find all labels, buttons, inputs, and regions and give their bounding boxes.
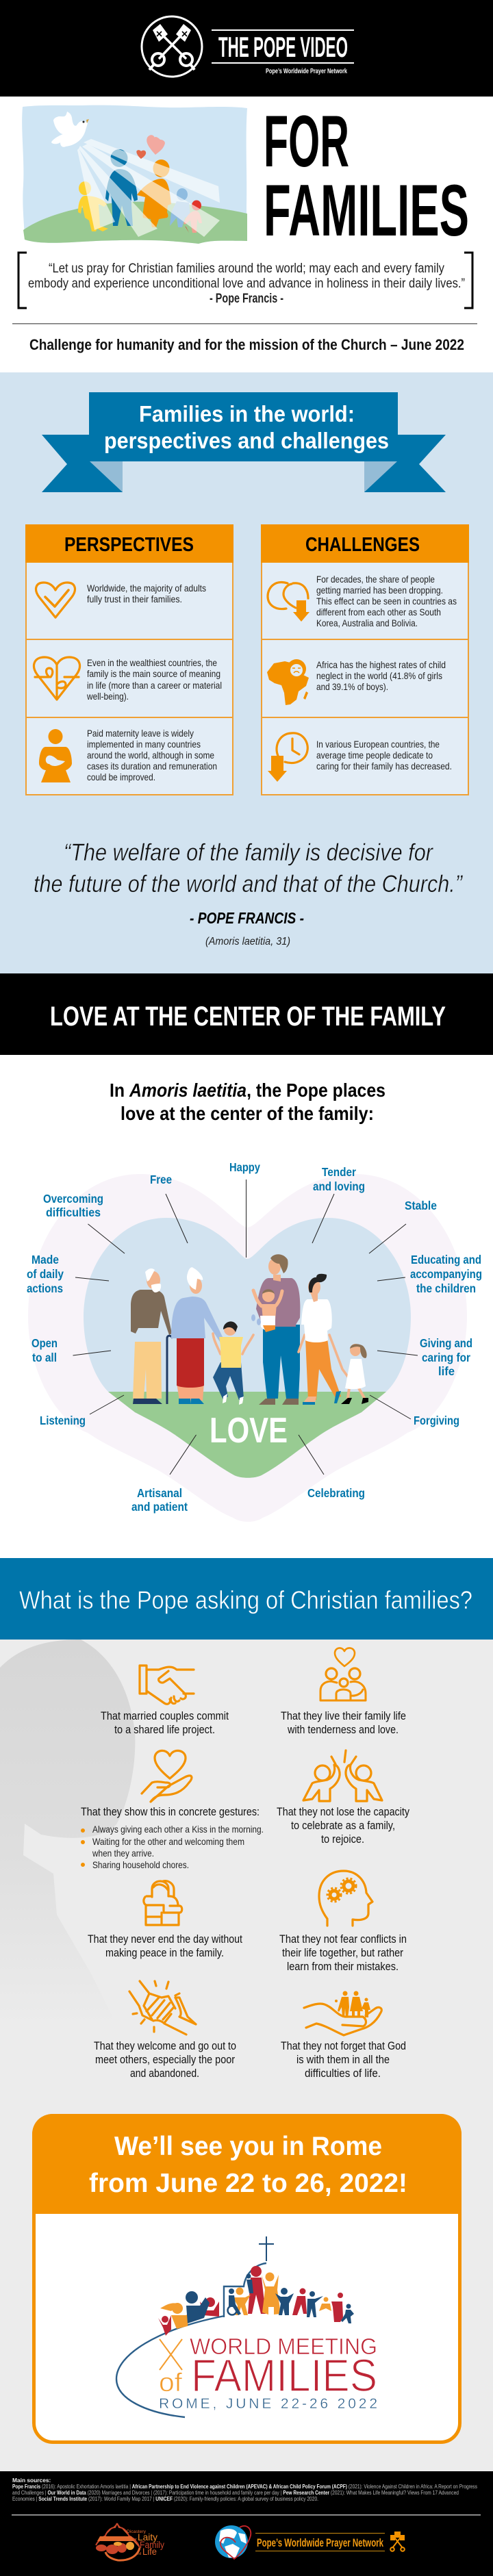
logo: dicastery for laity family and life: for [133,2538,137,2542]
text: shared life: to a shared life project. [114,1723,215,1736]
text: neglect: and 39.1% of boys). [316,682,388,692]
text: welcome others [94,2039,236,2080]
text: make peace [88,1933,242,1959]
text: neglect: Africa has the highest rates of child [316,660,446,670]
footer [0,2471,493,2576]
text: conflicts: learn from their mistakes. [287,1960,399,1973]
section band: what is the pope asking [0,1558,493,1640]
figure: father with baby [251,1254,300,1405]
people [158,2266,343,2336]
figure: girl [341,1344,368,1404]
label: free: Free [150,1173,172,1186]
silhouette of the pope [0,1640,135,2061]
text: marriage [316,574,457,628]
icon: head with gears [319,1871,372,1926]
label: tender and loving [313,1165,365,1193]
prayer text [28,262,465,306]
icon: embrace [144,1881,182,1925]
icon: dove [51,112,89,147]
inner heart [84,1218,411,1478]
logo: world meeting of families [116,2236,377,2417]
text: conflicts: That they not fear conflicts in [279,1933,407,1946]
text: marriage: different from each other as South [316,607,441,617]
ground [108,1392,386,1478]
wordmark: THE POPE VIDEO [218,31,348,63]
rule above wordmark [212,29,354,31]
dome and arc [116,2263,266,2417]
figure: mother [299,1274,351,1405]
quote block with brackets [18,253,472,308]
quote: welfare of the family: (Amoris laetitia, 31) [205,936,290,947]
label: overcoming difficulties: difficulties [46,1206,101,1219]
icon: helping hands [129,1981,196,2035]
text: marriage: Korea, Australia and Bolivia. [316,618,418,628]
connector lines [73,1179,418,1475]
text: neglect [316,660,446,692]
label: forgiving: Forgiving [414,1414,459,1427]
yellow child [78,181,108,231]
text: marriage: This effect can be seen in countries as [316,596,457,607]
icon: keys [390,2532,405,2551]
label: happy: Happy [229,1160,260,1174]
sources: Economies | Social Trends Institute (2017): World Family Map 2017 | UNICEF (2020): Family-friendly policies: A global survey of business policy 2020. [12,2495,318,2502]
text: maternity: around the world, although in some [87,750,214,761]
logo: dicastery for laity family and life: Life [142,2546,157,2557]
label: artisanal and patient [131,1486,188,1514]
label: artisanal and patient: Artisanal [137,1486,182,1500]
figure: grandmother [171,1267,223,1404]
heading: CHALLENGES [305,534,420,556]
icon: small heart [136,150,146,159]
logo: dicastery for laity family and life: Dicastery [127,2529,147,2534]
light rays [77,139,220,237]
text: meaning: well-being). [86,691,129,702]
subheading: amoris laetitia [110,1080,385,1124]
banner: perspectives and challenges [104,428,389,453]
text: conflicts: their life together, but rather [282,1946,403,1959]
label: overcoming difficulties [43,1192,103,1219]
sources: and Challenges | Our World in Data (2020) Marriages and Divorces | (2017): Participation time in household and family care per day | Pew Research Center (2021): What Makes Life Meaningful? Views From 17 Advanced [12,2489,459,2496]
label: educating and accompanying: the children [416,1281,476,1295]
rule below wordmark [212,62,354,64]
text: marriage: getting married has been dropping. [316,585,443,596]
text: time [316,739,452,771]
label: giving and caring for life [420,1336,472,1378]
icon: large heart [147,135,165,155]
panel: challenges [261,524,469,795]
adult woman [137,160,171,227]
label: educating and accompanying [410,1253,482,1295]
label: giving and caring for life: caring for [422,1351,470,1364]
label: made of daily actions [27,1253,64,1295]
icon: high five [303,1750,382,1801]
text: make peace: That they never end the day without [88,1933,242,1946]
text: god with them: is with them in all the [296,2053,390,2066]
panel: families in the world [0,372,493,973]
label: made of daily actions: of daily [27,1267,64,1281]
sources: Main sources: [12,2477,51,2484]
logo: dicastery for laity family and life: Laity [138,2532,157,2542]
text: trust: fully trust in their families. [87,594,182,604]
label: made of daily actions: actions [27,1281,63,1295]
icon: family in hand [304,1991,381,2035]
label: educating and accompanying: accompanying [410,1267,482,1281]
label: open to all [31,1336,58,1364]
left bracket [18,253,27,308]
text: welcome others: and abandoned. [130,2067,199,2080]
icon: heart in hand [142,1750,192,1802]
bullet list: Waiting for the other and welcoming them [92,1836,244,1847]
text: meaning: in life (more than a career or material [87,680,222,691]
panel: see you in rome [32,2114,462,2443]
logo: dicastery for laity family and life: and [136,2552,142,2556]
banner [42,392,446,492]
world meeting: WORLD MEETING [190,2334,377,2359]
LOVE label: LOVE [210,1411,288,1451]
icon: family with heart [320,1648,366,1700]
label: celebrating: Celebrating [307,1486,365,1500]
text: conflicts [279,1933,407,1973]
icon: mother and baby [39,729,72,782]
bullet list: Always giving each other a Kiss in the morning. [92,1824,264,1835]
title: for families [264,100,469,251]
cross [259,2236,274,2261]
small blue child [170,188,190,227]
text: meaning: family is the main source of meaning [87,669,220,679]
text: welcome others: That they welcome and go out to [94,2039,236,2052]
heading: PERSPECTIVES [64,534,194,556]
quote: welfare of the family: - POPE FRANCIS - [190,909,304,927]
text: maternity: could be improved. [87,772,155,782]
text: tenderness: That they live their family life [281,1709,406,1722]
bullet list [81,1824,264,1870]
text: concrete gestures [81,1805,264,1870]
rule above network name [255,2533,385,2534]
date: ROME, JUNE 22-26 2022 [159,2396,377,2412]
label: open to all: to all [32,1351,57,1364]
figure: grandfather [131,1268,173,1404]
label: artisanal and patient: and patient [131,1500,188,1514]
header band [0,0,493,97]
adult man [105,149,138,226]
icon: handshake [140,1666,194,1704]
icon: puzzle heart [34,657,79,700]
heading: We’ll see you in Rome [114,2132,382,2161]
text: tenderness [281,1709,406,1736]
X numeral [160,2339,182,2370]
text: maternity: implemented in many countries [87,739,201,750]
text: god with them: difficulties of life. [305,2067,381,2080]
text: concrete gestures: That they show this in concrete gestures: [81,1805,260,1818]
quote: welfare of the family: “The welfare of the family is decisive for [64,839,433,866]
section band: love at the center [0,973,493,1055]
bullet list: when they arrive. [92,1848,154,1859]
banner title: Families in the world: [139,401,355,426]
icon: clock with arrow [268,733,307,782]
text: celebrate [277,1805,410,1846]
text: maternity [87,728,217,782]
sources [12,2477,477,2502]
text: celebrate: That they not lose the capacity [277,1805,410,1818]
label: giving and caring for life: life [438,1364,455,1378]
heading [89,2132,407,2198]
outer heart [28,1174,467,1522]
text: trust: Worldwide, the majority of adults [87,583,206,594]
text: god with them: That they not forget that God [281,2039,406,2052]
prayer text: “Let us pray for Christian families around the world; may each and every family [49,262,444,276]
text: make peace: making peace in the family. [105,1946,224,1959]
icon: africa with sad child [267,659,309,705]
title: for families: FOR [264,100,349,182]
label: listening: Listening [40,1414,86,1427]
subheading: amoris laetitia: In Amoris laetitia, the Pope places [110,1080,385,1101]
label: giving and caring for life: Giving and [420,1336,472,1350]
label: open to all: Open [31,1336,58,1350]
icon: crossed keys logo [142,16,202,77]
text: trust [87,583,206,604]
label: tender and loving: Tender [322,1165,356,1179]
families: FAMILIES [191,2350,377,2401]
text: marriage: For decades, the share of people [316,574,435,585]
text: maternity: Paid maternity leave is widely [87,728,194,739]
text: neglect: neglect in the world (41.8% of girls [316,671,442,681]
label: stable: Stable [405,1199,437,1212]
text: god with them [281,2039,406,2080]
chart: love heart diagram [27,1160,482,1522]
text: celebrate: to rejoice. [321,1833,364,1846]
heading: from June 22 to 26, 2022! [89,2169,407,2198]
icon: heart check [36,583,75,617]
logo: dicastery for laity family and life: Family [140,2539,164,2550]
panel: perspectives [25,524,233,795]
text: meaning: Even in the wealthiest countries, the [87,658,217,668]
network name: Pope’s Worldwide Prayer Network [257,2536,383,2549]
text: time: average time people dedicate to [316,750,433,761]
subtitle: Pope’s Worldwide Prayer Network [266,67,347,75]
prayer text: - Pope Francis - [210,292,283,306]
text: welcome others: meet others, especially the poor [95,2053,235,2066]
bullet list: Sharing household chores. [92,1859,189,1870]
panel: pope's requests [0,1640,493,2471]
label: overcoming difficulties: Overcoming [43,1192,103,1206]
text: time: In various European countries, the [316,739,440,750]
text: meaning [86,658,222,702]
label: educating and accompanying: Educating and [411,1253,481,1266]
quote: welfare of the family [34,839,463,947]
text: tenderness: with tenderness and love. [287,1723,399,1736]
label: made of daily actions: Made [31,1253,59,1266]
subheading: amoris laetitia: love at the center of the family: [121,1103,374,1124]
text: shared life [101,1709,229,1736]
text: shared life: That married couples commit [101,1709,229,1722]
text: time: caring for their family has decreased. [316,761,452,771]
text: celebrate: to celebrate as a family, [291,1819,395,1832]
small red child [184,200,202,233]
icon: rings and arrow [268,583,309,622]
right bracket [464,253,472,308]
logo: globe with heart [215,2525,251,2559]
logo: dicastery for laity family and life [96,2523,164,2560]
label: tender and loving: and loving [313,1179,365,1193]
figure: boy [213,1321,253,1405]
text: maternity: cases its duration and remuneration [87,761,217,771]
illustration: family under dove [22,105,247,244]
of: of [159,2369,182,2397]
